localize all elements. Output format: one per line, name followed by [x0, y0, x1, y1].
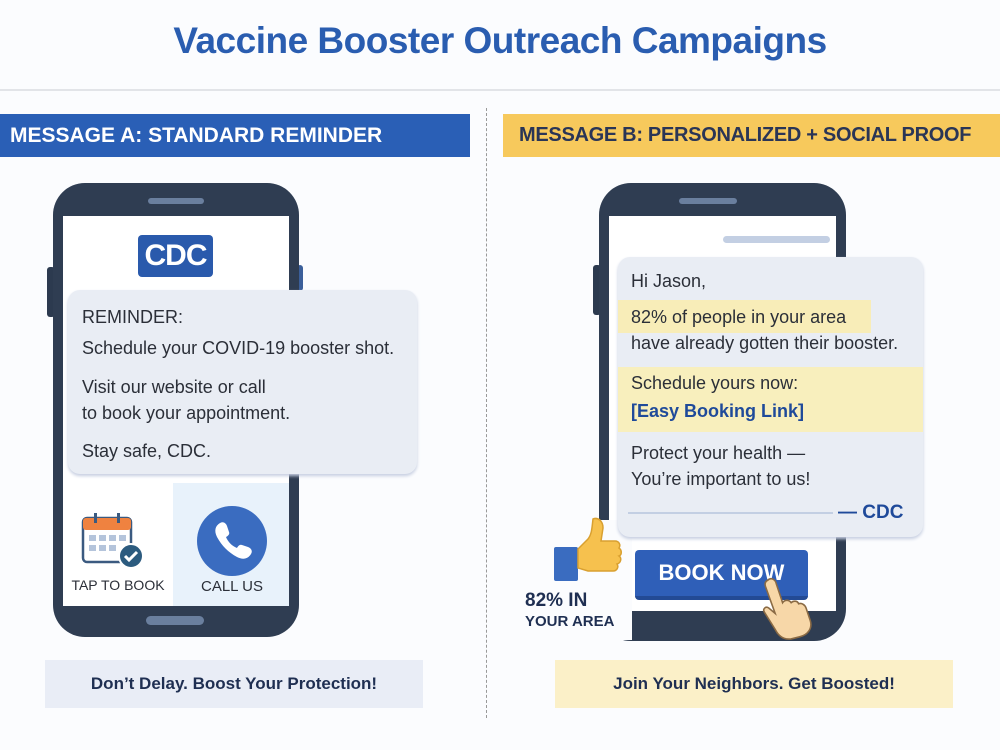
message bubble B: [Easy Booking Link]	[631, 401, 804, 421]
message bubble A: Visit our website or call	[82, 377, 266, 397]
header A: MESSAGE A: STANDARD REMINDER	[10, 124, 382, 147]
callout B: Join Your Neighbors. Get Boosted!	[613, 674, 895, 693]
message bubble B: Protect your health —	[631, 443, 805, 463]
header B	[503, 114, 1000, 157]
panel: message B	[503, 114, 1000, 708]
text: 82% in your area: YOUR AREA	[525, 613, 614, 630]
text: 82% in your area	[525, 590, 614, 630]
highlight: 82%	[618, 300, 871, 333]
label: tap to book: TAP TO BOOK	[71, 577, 165, 593]
phone B	[593, 183, 846, 641]
callout A: Don’t Delay. Boost Your Protection!	[91, 674, 377, 693]
message bubble B: You’re important to us!	[631, 469, 810, 489]
CDC logo	[138, 235, 213, 277]
icon: pointing hand	[762, 578, 812, 640]
callout B	[555, 660, 953, 708]
message bubble A	[68, 290, 417, 474]
panel: message A	[0, 114, 470, 708]
label: call us: CALL US	[201, 578, 263, 595]
message bubble A: Schedule your COVID-19 booster shot.	[82, 338, 394, 358]
button: book now	[635, 550, 808, 600]
icon: calendar	[82, 513, 142, 567]
message bubble A: to book your appointment.	[82, 403, 290, 423]
text: 82% in your area: 82% IN	[525, 590, 587, 611]
message bubble B: — CDC	[838, 502, 903, 523]
white cutout over phone lower-left	[587, 520, 632, 640]
message bubble B: have already gotten their booster.	[631, 333, 898, 353]
icon: thumbs up	[554, 518, 622, 581]
icon: phone call	[197, 506, 267, 576]
callout A	[45, 660, 423, 708]
CDC logo: CDC	[144, 239, 206, 272]
message bubble A: REMINDER:	[82, 307, 183, 327]
highlight: booking link	[618, 367, 923, 432]
message bubble B: Hi Jason,	[631, 271, 706, 291]
message bubble A: Stay safe, CDC.	[82, 441, 211, 461]
message bubble B	[618, 257, 923, 537]
message bubble B: 82% of people in your area	[631, 307, 846, 327]
phone A	[47, 183, 303, 637]
message bubble B: Schedule yours now:	[631, 373, 798, 393]
button: book now: BOOK NOW	[659, 560, 784, 585]
header A	[0, 114, 470, 157]
title: Vaccine Booster Outreach Campaigns	[173, 20, 827, 61]
header B: MESSAGE B: PERSONALIZED + SOCIAL PROOF	[519, 124, 971, 146]
